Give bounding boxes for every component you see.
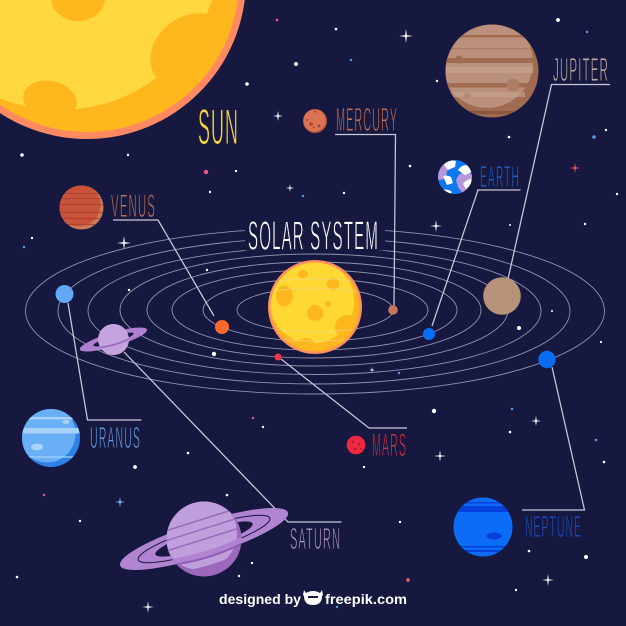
mercury leader [335, 134, 396, 306]
mars [274, 354, 407, 463]
central sun [268, 260, 362, 354]
mars planet [347, 436, 365, 454]
solar system title [245, 212, 385, 258]
jupiter planet [446, 24, 538, 118]
icon: freepik logo [303, 590, 323, 605]
uranus planet [22, 409, 80, 467]
mercury [303, 101, 398, 315]
venus leader [113, 220, 214, 316]
jupiter orbit planet [483, 277, 521, 315]
earth [423, 159, 520, 340]
freepik.com text: freepik.com [325, 591, 407, 607]
venus orbit dot [215, 320, 229, 334]
solar system infographic: MERCURY [336, 101, 398, 138]
earth planet [438, 160, 473, 195]
big sun [0, 0, 249, 139]
solar system infographic: SOLAR SYSTEM [248, 212, 379, 258]
solar system infographic: SATURN [290, 521, 341, 556]
venus planet [58, 184, 104, 230]
uranus orbit dot [56, 285, 74, 303]
footer credit [219, 590, 407, 607]
jupiter [441, 16, 610, 315]
saturn leader [124, 352, 342, 522]
saturn [78, 323, 342, 585]
earth leader [432, 190, 520, 326]
sparkle stars [115, 29, 580, 613]
mars leader [281, 359, 407, 428]
designed by text: designed by [219, 591, 301, 607]
neptune orbit dot [538, 351, 556, 368]
earth orbit dot [423, 328, 435, 340]
solar system infographic: MARS [372, 427, 407, 463]
large saturn planet [120, 502, 288, 576]
mars orbit dot [274, 354, 282, 360]
small saturn orbit planet [78, 323, 149, 356]
solar system infographic: URANUS [90, 420, 141, 455]
neptune [453, 351, 584, 556]
neptune planet [453, 498, 513, 556]
orbits [26, 228, 604, 394]
uranus leader [68, 303, 142, 420]
venus: VENUS [111, 188, 156, 224]
venus [58, 184, 229, 334]
neptune leader [522, 367, 584, 510]
solar system infographic: EARTH [480, 159, 520, 194]
jupiter leader [508, 84, 610, 279]
mercury orbit dot [388, 305, 398, 315]
solar system infographic: SUN [198, 99, 239, 155]
uranus [18, 285, 142, 467]
mercury planet [303, 109, 327, 133]
